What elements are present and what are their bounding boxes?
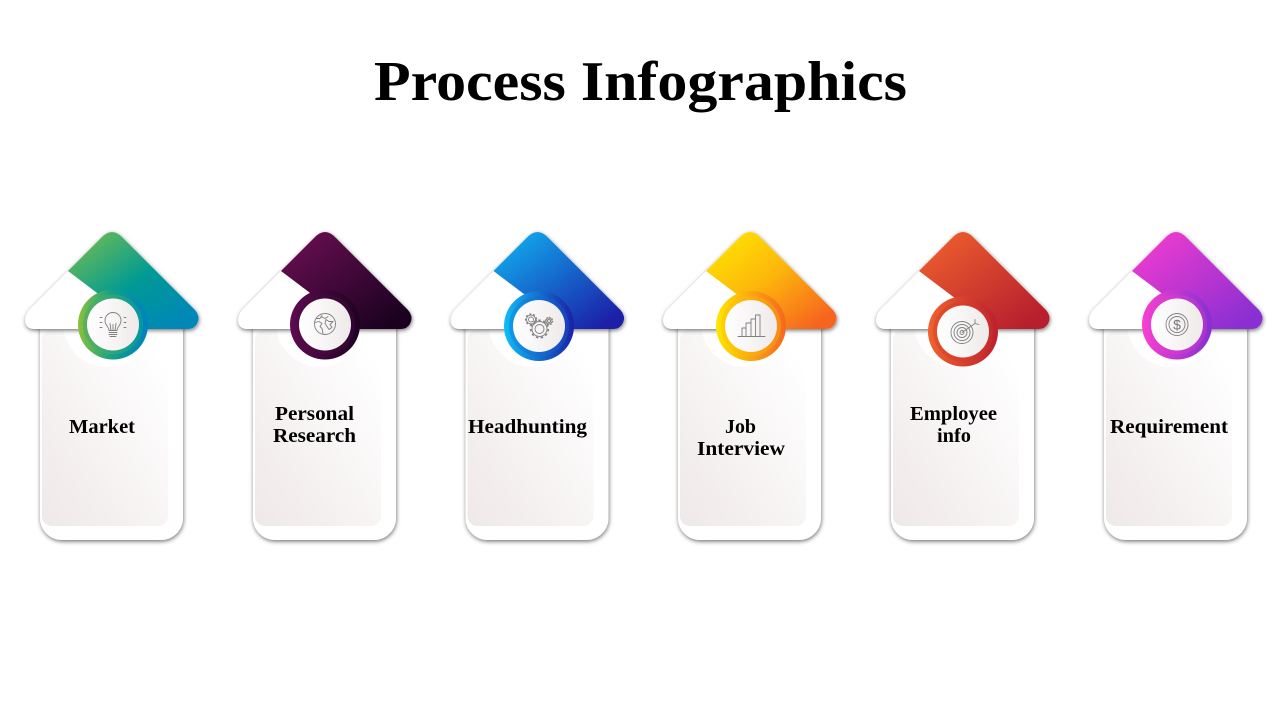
- card body: [891, 300, 1034, 540]
- arrow head: [876, 232, 1050, 329]
- card body: [1104, 300, 1247, 540]
- panel cut-out: [1127, 279, 1215, 367]
- label: [273, 403, 356, 447]
- inner panel: [680, 330, 806, 526]
- ring with icon: [504, 291, 574, 361]
- step 2: Personal Research: [238, 232, 412, 540]
- icon: light bulb: [100, 312, 126, 336]
- inner panel: [255, 330, 381, 526]
- label: Market: [69, 416, 135, 438]
- ring with icon: [1142, 290, 1212, 360]
- ring with icon: [928, 296, 998, 366]
- label line 1: Job: [725, 416, 756, 438]
- icon: globe: [314, 314, 336, 334]
- inner panel: [893, 330, 1019, 526]
- label: Headhunting: [468, 416, 587, 438]
- arrow head: [663, 232, 837, 329]
- label: Requirement: [1110, 416, 1228, 438]
- step 4: Job Interview: [663, 232, 837, 540]
- label line 2: info: [937, 425, 971, 447]
- step 3: Headhunting: [451, 232, 624, 540]
- step 5: Employee info: [876, 232, 1050, 540]
- step 1: Market: [25, 232, 199, 540]
- panel cut-out: [914, 279, 1002, 367]
- title: Process Infographics: [374, 51, 907, 113]
- arrow head: [451, 232, 624, 329]
- coloured arrow section: [494, 232, 624, 329]
- label line 1: Personal: [275, 403, 354, 425]
- card body: [40, 300, 183, 540]
- inner panel: [1106, 330, 1232, 526]
- coloured arrow section: [281, 232, 412, 329]
- coloured arrow section: [919, 232, 1050, 329]
- arrow head: [25, 232, 199, 329]
- label line 2: Research: [273, 425, 356, 447]
- ring with icon: [290, 290, 360, 360]
- step 6: Requirement: [1089, 232, 1263, 540]
- card body: [466, 300, 608, 540]
- arrow head: [238, 232, 412, 329]
- panel cut-out: [276, 279, 364, 367]
- label line 1: Employee: [910, 403, 997, 425]
- ring with icon: [716, 291, 786, 361]
- label: [910, 403, 997, 447]
- icon: bar chart: [738, 315, 765, 336]
- icon: gears: [526, 314, 553, 338]
- label line 2: Interview: [697, 438, 786, 460]
- icon: dollar coin: $: [1173, 316, 1181, 332]
- card body: [678, 300, 821, 540]
- coloured arrow section: [68, 232, 199, 329]
- inner panel: [42, 330, 168, 526]
- ring with icon: [78, 290, 148, 360]
- panel cut-out: [488, 279, 576, 367]
- panel cut-out: [63, 279, 151, 367]
- inner panel: [468, 330, 594, 526]
- arrow head: [1089, 232, 1263, 329]
- coloured arrow section: [1132, 232, 1263, 329]
- card body: [253, 300, 396, 540]
- label: [697, 416, 786, 460]
- panel cut-out: [701, 279, 789, 367]
- icon: target: [951, 320, 979, 344]
- coloured arrow section: [706, 232, 837, 329]
